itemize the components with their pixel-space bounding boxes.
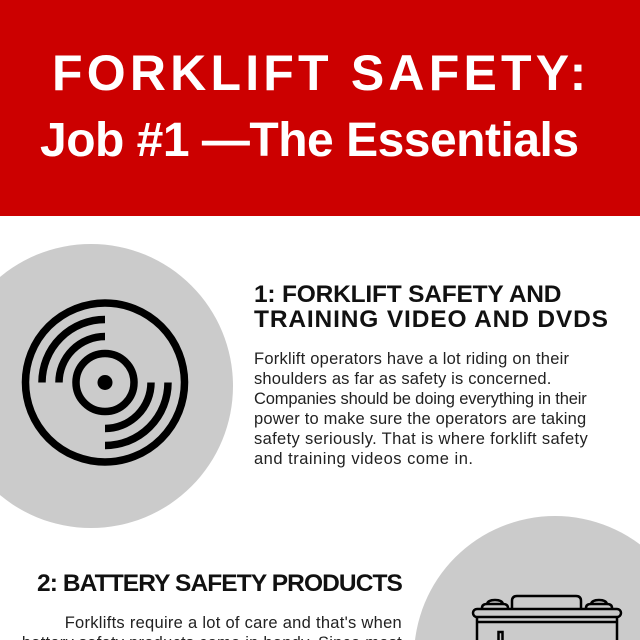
section 1 body text: safety seriously. That is where forklift safety: [254, 430, 588, 448]
icon: disc in grey circle: [0, 244, 233, 528]
title line 1: FORKLIFT SAFETY:: [52, 45, 590, 101]
section 1 body text: shoulders as far as safety is concerned.: [254, 370, 552, 388]
section 1 body text: Forklift operators have a lot riding on their: [254, 350, 569, 368]
section 1 heading: [254, 281, 609, 333]
section 2 body text: [22, 614, 402, 640]
section 1 heading: 1: FORKLIFT SAFETY AND: [254, 281, 561, 308]
section 1 body text: Companies should be doing everything in their: [254, 390, 587, 408]
section 2 body text: Forklifts require a lot of care and that's when: [65, 614, 402, 632]
section 1 body text: and training videos come in.: [254, 450, 473, 468]
icon: battery in grey circle: [415, 516, 640, 640]
section 2 heading: 2: BATTERY SAFETY PRODUCTS: [37, 570, 402, 597]
header banner: [0, 0, 640, 216]
title line 2: Job #1 —The Essentials: [40, 114, 579, 167]
section 1 body text: [254, 350, 588, 468]
section 1 heading: TRAINING VIDEO AND DVDS: [254, 306, 609, 333]
section 1 body text: power to make sure the operators are taking: [254, 410, 586, 428]
